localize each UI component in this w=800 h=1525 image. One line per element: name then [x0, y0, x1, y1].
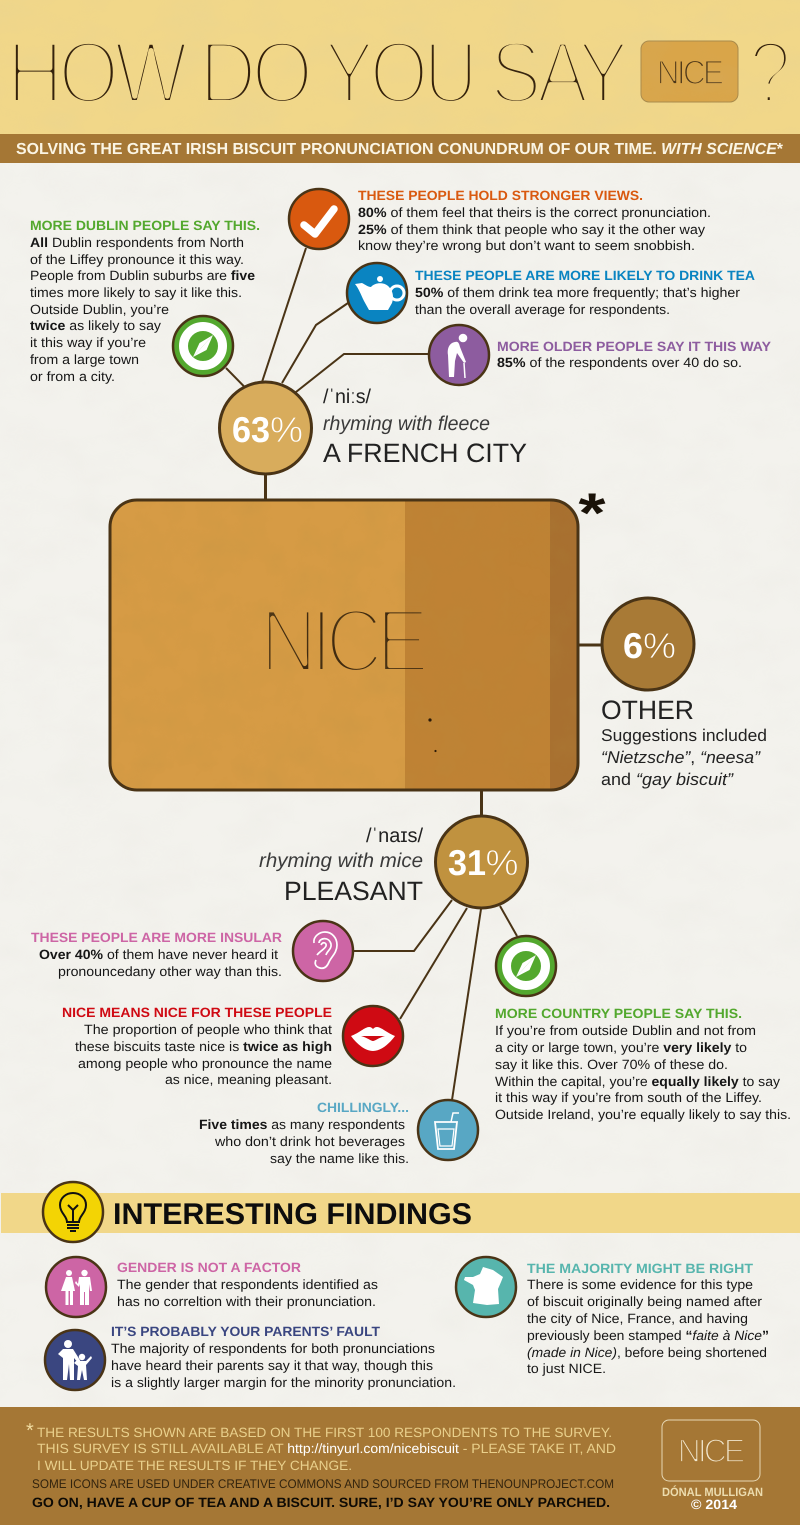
pronunciation label: pleasant: /ˈnaɪs/: [366, 825, 423, 847]
text: older people: [497, 339, 771, 370]
title: SAY: [490, 22, 628, 122]
text: more Dublin people: of the Liffey pronounce it this way.: [30, 252, 244, 267]
icon: older person: [429, 325, 489, 385]
text: more country people: it this way if you’re from south of the Liffey.: [495, 1090, 762, 1105]
text: tea drinkers: THESE PEOPLE ARE MORE LIKELY TO DRINK TEA: [415, 268, 755, 283]
text: more country people: If you’re from outside Dublin and not from: [495, 1023, 756, 1038]
text: stronger views: [358, 188, 711, 253]
icon: parent and child: [45, 1330, 105, 1390]
text: majority might be right: to just NICE.: [527, 1361, 606, 1376]
text: parents: have heard their parents say it that way, though this: [111, 1358, 433, 1373]
text: stronger views: know they’re wrong but don’t want to seem snobbish.: [358, 238, 695, 253]
node: 63 percent: %: [270, 409, 303, 450]
text: other: Suggestions included: [601, 726, 767, 745]
icon: compass (Dublin): [173, 316, 233, 376]
text: majority might be right: of biscuit originally being named after: [527, 1294, 763, 1309]
header panel: [0, 0, 800, 134]
text: more Dublin people: All Dublin respondents from North: [30, 235, 244, 250]
icon: light bulb: [43, 1182, 103, 1242]
text: stronger views: 25% of them think that people who say it the other way: [358, 222, 705, 237]
node: 6 percent: [602, 598, 694, 690]
footnote text: THIS SURVEY IS STILL AVAILABLE AT http://tinyurl.com/nicebiscuit - PLEASE TAKE IT, AND: [37, 1441, 616, 1456]
icon: lips: [343, 1006, 403, 1066]
text: more Dublin people: twice as likely to say: [30, 318, 161, 333]
pronunciation label: French city: A FRENCH CITY: [323, 438, 527, 468]
connector line: other: [578, 644, 602, 646]
node: 6 percent: %: [643, 625, 676, 666]
icon: teapot: [347, 263, 407, 323]
node: 6 percent: 6: [623, 625, 643, 666]
text: other: “Nietzsche”, “neesa”: [601, 748, 761, 767]
text: insular: [31, 930, 282, 979]
pronunciation label: pleasant: rhyming with mice: [259, 850, 423, 872]
pronunciation label: French city: /ˈniːs/: [323, 386, 371, 408]
text: nice means nice: as nice, meaning pleasant.: [165, 1072, 332, 1087]
text: more country people: Within the capital, you’re equally likely to say: [495, 1074, 780, 1089]
text: majority might be right: [527, 1261, 769, 1376]
text: more Dublin people: People from Dublin suburbs are five: [30, 268, 255, 283]
text: tea drinkers: 50% of them drink tea more frequently; that’s higher: [415, 285, 741, 300]
text: stronger views: 80% of them feel that theirs is the correct pronunciation.: [358, 205, 711, 220]
text: gender: GENDER IS NOT A FACTOR: [117, 1260, 301, 1275]
text: older people: 85% of the respondents over 40 do so.: [497, 355, 742, 370]
pronunciation label: pleasant: [259, 825, 423, 906]
text: older people: MORE OLDER PEOPLE SAY IT THIS WAY: [497, 339, 771, 354]
icon: check mark: [289, 189, 349, 249]
footnote text: *: [26, 1420, 34, 1442]
asterisk: *: [578, 481, 606, 544]
text: majority might be right: previously been stamped “faite à Nice”: [527, 1328, 769, 1343]
text: chillingly: who don’t drink hot beverages: [214, 1134, 405, 1149]
text: more Dublin people: from a large town: [30, 352, 139, 367]
author credit: DÓNAL MULLIGAN: [662, 1485, 763, 1499]
connector lines: 63% branch: [226, 248, 428, 500]
text: other: and “gay biscuit”: [601, 770, 734, 789]
text: more Dublin people: MORE DUBLIN PEOPLE SAY THIS.: [30, 218, 260, 233]
text: tea drinkers: [415, 268, 755, 317]
text: insular: pronouncedany other way than this.: [58, 964, 282, 979]
text: more country people: Outside Ireland, you’re equally likely to say this.: [495, 1107, 791, 1122]
footer logo: NICE: [678, 1432, 744, 1469]
icon: couple: [46, 1257, 106, 1317]
node: 31 percent: 31: [448, 842, 486, 883]
text: nice means nice: NICE MEANS NICE FOR THESE PEOPLE: [62, 1005, 332, 1020]
text: chillingly: CHILLINGLY...: [317, 1100, 409, 1115]
text: more Dublin people: [30, 218, 260, 384]
biscuit stamp text: NICE: [260, 591, 426, 692]
icon: map of France: [456, 1257, 516, 1317]
title: YOU: [324, 22, 473, 122]
pronunciation label: French city: [323, 386, 527, 468]
title: DO: [199, 22, 310, 122]
icon: ear: [293, 921, 353, 981]
pronunciation label: French city: rhyming with fleece: [323, 413, 490, 435]
title: HOW: [7, 22, 188, 122]
text: parents: [111, 1324, 456, 1390]
subtitle band: [0, 134, 800, 163]
footnote text: [26, 1420, 616, 1510]
text: majority might be right: the city of Nice, France, and having: [527, 1311, 748, 1326]
biscuit: [110, 500, 578, 790]
text: insular: THESE PEOPLE ARE MORE INSULAR: [31, 930, 282, 945]
text: chillingly: say the name like this.: [270, 1151, 409, 1166]
text: majority might be right: THE MAJORITY MIGHT BE RIGHT: [527, 1261, 754, 1276]
text: gender: The gender that respondents identified as: [117, 1277, 378, 1292]
footnote text: SOME ICONS ARE USED UNDER CREATIVE COMMONS AND SOURCED FROM THENOUNPROJECT.COM: [32, 1477, 614, 1491]
text: parents: The majority of respondents for both pronunciations: [111, 1341, 435, 1356]
text: more Dublin people: times more likely to say it like this.: [30, 285, 242, 300]
text: majority might be right: There is some evidence for this type: [527, 1277, 753, 1292]
text: more country people: MORE COUNTRY PEOPLE SAY THIS.: [495, 1006, 742, 1021]
text: gender: [117, 1260, 378, 1309]
text: parents: is a slightly larger margin for the minority pronunciation.: [111, 1375, 456, 1390]
text: more Dublin people: or from a city.: [30, 369, 115, 384]
footer logo: [662, 1420, 760, 1481]
text: insular: Over 40% of them have never heard it: [39, 947, 278, 962]
author credit: © 2014: [691, 1497, 738, 1512]
text: chillingly: Five times as many respondents: [199, 1117, 405, 1132]
biscuit stamp text: NICE: [260, 591, 426, 692]
node: 31 percent: %: [486, 842, 518, 883]
text: more Dublin people: it this way if you’re: [30, 335, 146, 350]
title: [7, 22, 791, 122]
text: nice means nice: The proportion of people who think that: [84, 1022, 332, 1037]
footnote text: I WILL UPDATE THE RESULTS IF THEY CHANGE.: [37, 1458, 352, 1473]
footnote text: THE RESULTS SHOWN ARE BASED ON THE FIRST 100 RESPONDENTS TO THE SURVEY.: [37, 1425, 612, 1440]
text: nice means nice: [62, 1005, 332, 1087]
biscuit stamp text: [269, 612, 423, 670]
footnote text: GO ON, HAVE A CUP OF TEA AND A BISCUIT. SURE, I’D SAY YOU’RE ONLY PARCHED.: [32, 1495, 610, 1510]
interesting findings heading: [1, 1182, 800, 1242]
node: 63 percent: 63: [232, 409, 270, 450]
interesting findings heading: INTERESTING FINDINGS: [113, 1198, 472, 1231]
text: chillingly: [199, 1100, 409, 1166]
icon: compass (country): [496, 936, 556, 996]
text: nice means nice: these biscuits taste nice is twice as high: [75, 1039, 332, 1054]
author credit: [662, 1485, 763, 1512]
mini biscuit logo: [641, 41, 738, 102]
icon: cold drink: [418, 1100, 478, 1160]
mini biscuit logo: NICE: [657, 54, 723, 92]
footer panel: [0, 1407, 800, 1525]
pronunciation label: pleasant: PLEASANT: [284, 876, 423, 906]
text: gender: has no correltion with their pronunciation.: [117, 1294, 376, 1309]
text: other: OTHER: [601, 695, 694, 725]
subtitle band: SOLVING THE GREAT IRISH BISCUIT PRONUNCIATION CONUNDRUM OF OUR TIME. WITH SCIENCE*: [16, 141, 784, 158]
node: 31 percent: [436, 816, 528, 908]
connector lines: 31% branch: [353, 790, 517, 1100]
text: tea drinkers: than the overall average for respondents.: [415, 302, 670, 317]
text: stronger views: THESE PEOPLE HOLD STRONGER VIEWS.: [358, 188, 643, 203]
text: parents: IT’S PROBABLY YOUR PARENTS’ FAULT: [111, 1324, 381, 1339]
text: more Dublin people: Outside Dublin, you’re: [30, 302, 169, 317]
node: 63 percent: [220, 382, 312, 474]
text: majority might be right: (made in Nice), before being shortened: [527, 1345, 767, 1360]
text: more country people: say it like this. Over 70% of these do.: [495, 1057, 728, 1072]
title: ?: [749, 22, 791, 122]
text: other: [601, 695, 767, 789]
text: nice means nice: among people who pronounce the name: [78, 1056, 332, 1071]
text: more country people: [495, 1006, 791, 1122]
text: more country people: a city or large town, you’re very likely to: [495, 1040, 747, 1055]
